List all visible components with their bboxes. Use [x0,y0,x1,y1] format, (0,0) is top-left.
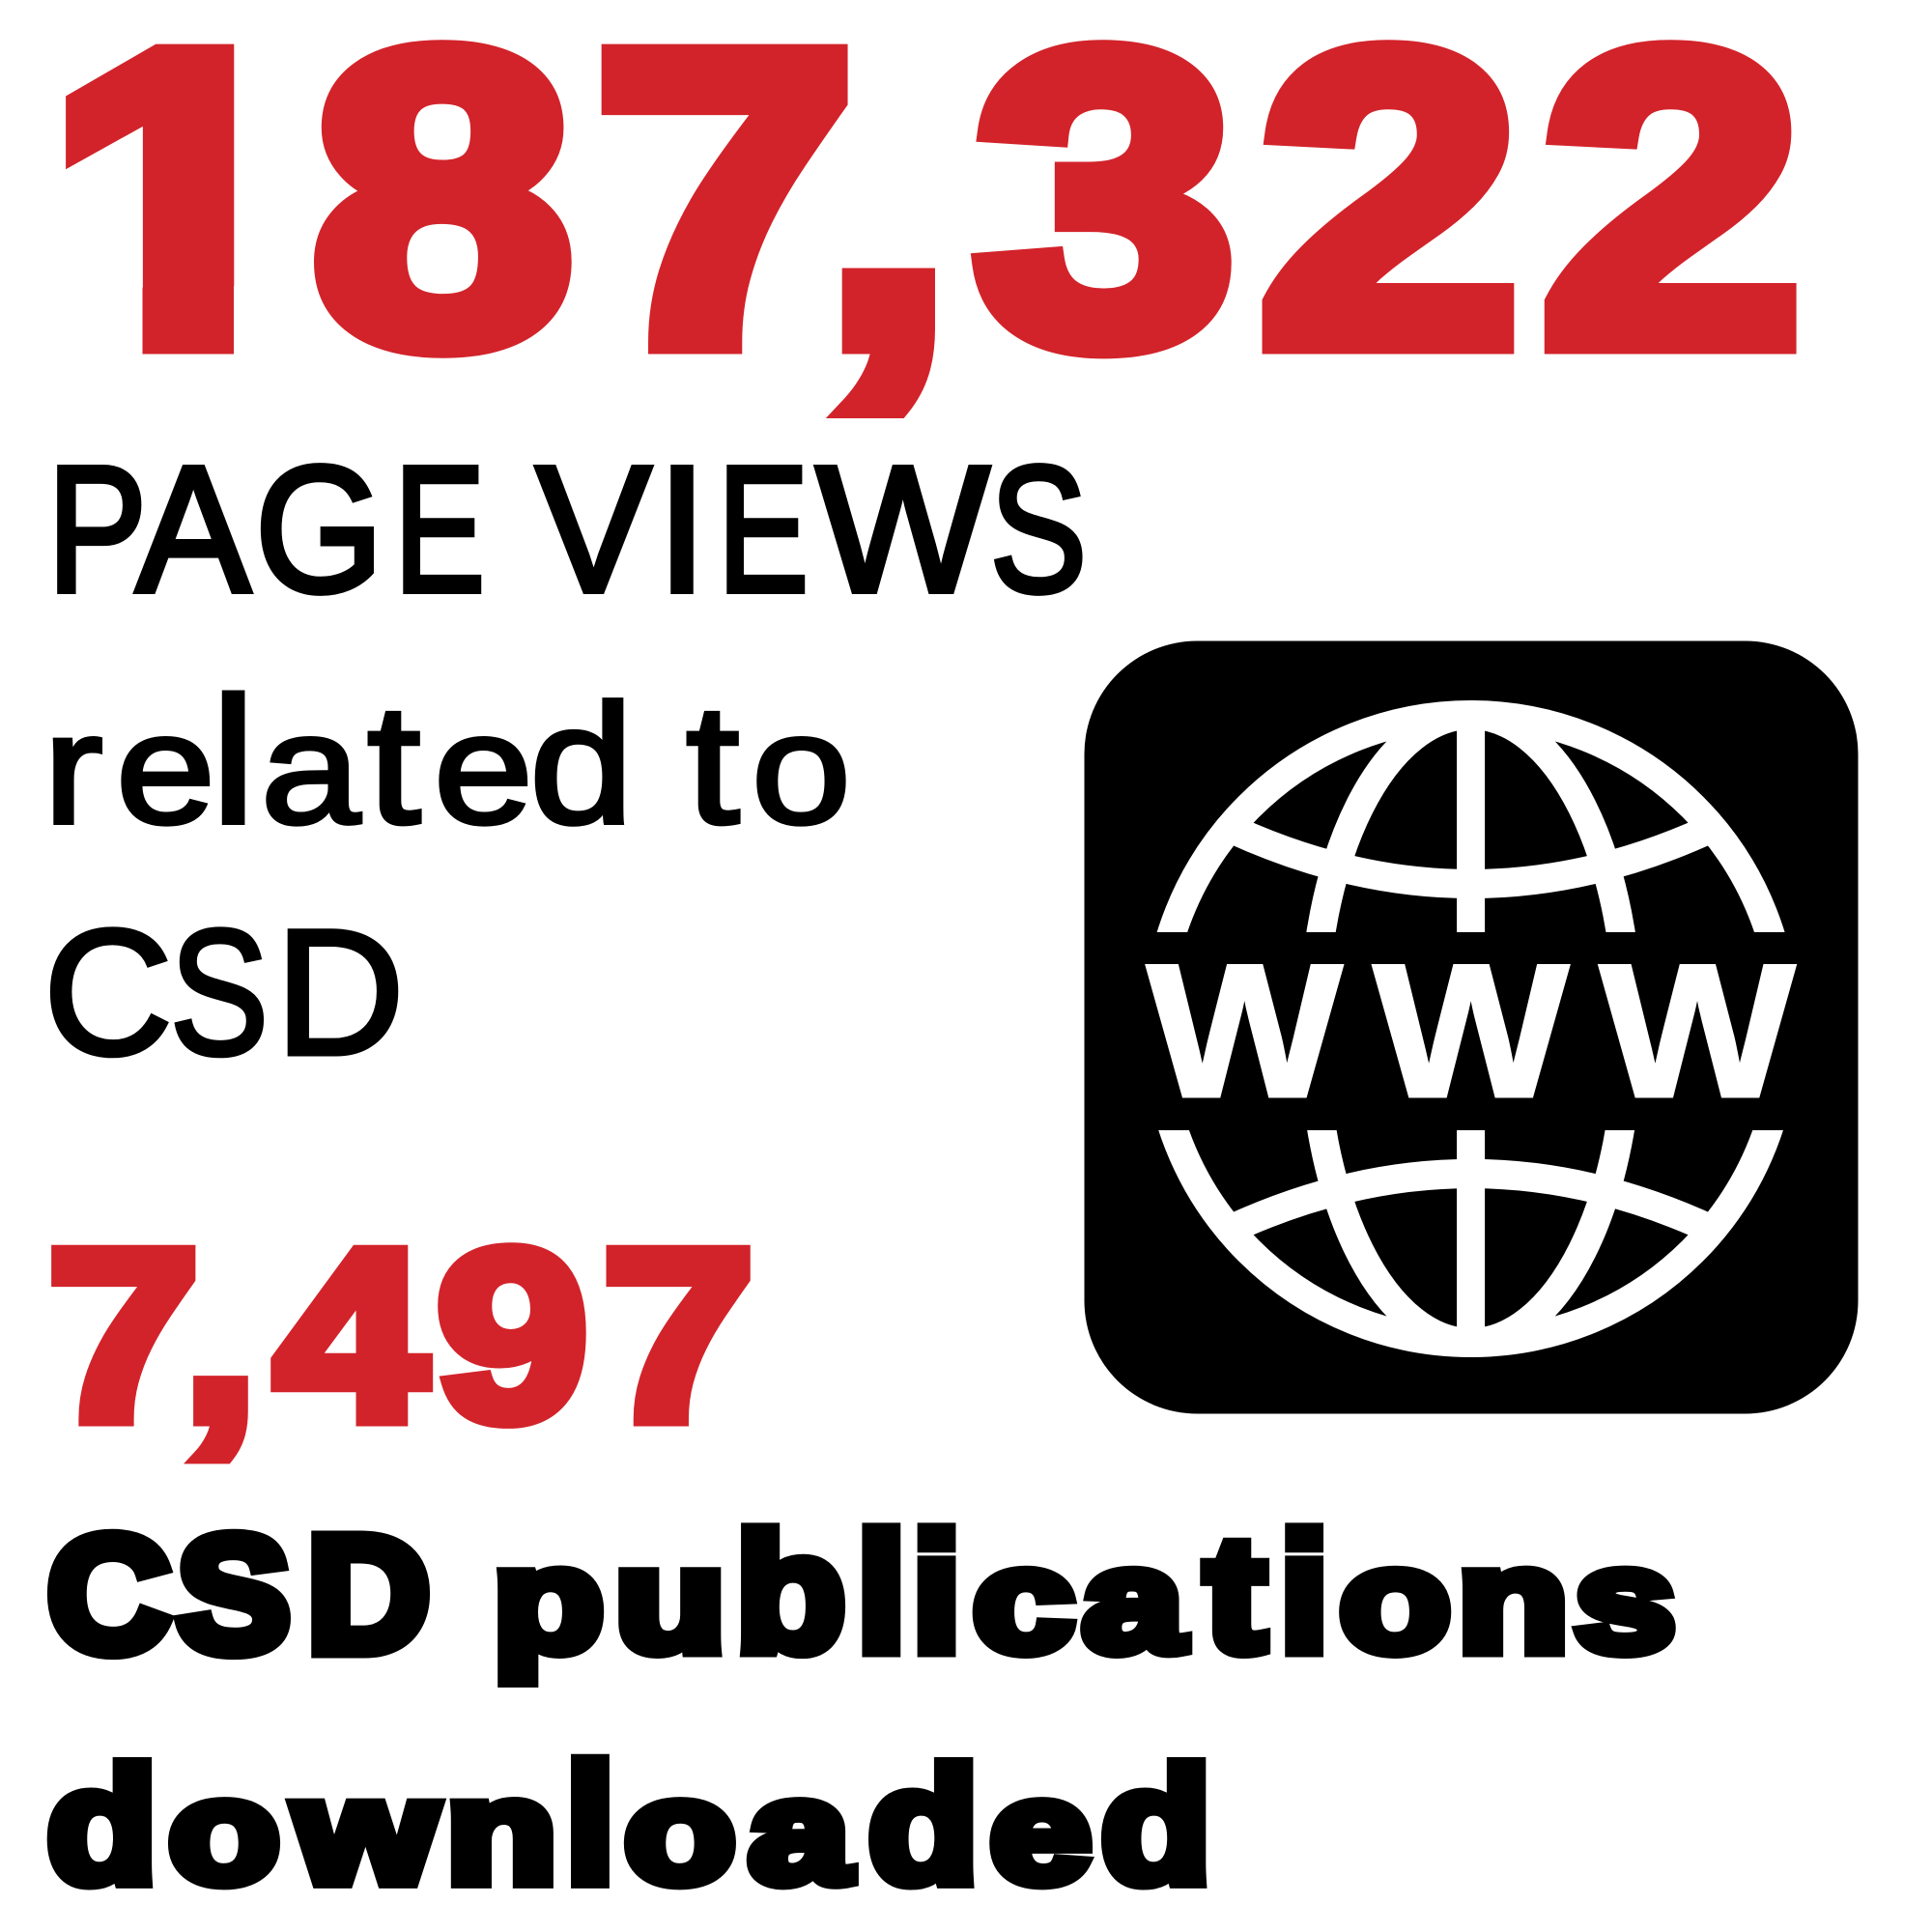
heading: CSD publications [47,1499,1675,1687]
label: related to: d [529,668,634,859]
label: PAGE VIEWS: S [990,430,1087,630]
icon: www globe: WWW [1147,923,1796,1137]
heading: CSD publications: CSD [47,1502,430,1686]
label: related to: a [261,680,360,856]
heading: downloaded: d [1101,1735,1211,1918]
label: related to: t [686,668,740,859]
heading: CSD publications: b [735,1499,846,1687]
label: CSD: D [275,894,405,1093]
heading: downloaded: l [565,1731,615,1918]
label: related to: t [367,668,421,859]
label: PAGE VIEWS: P [47,430,147,630]
label: related to: e [434,680,533,856]
heading: CSD publications: t [1205,1504,1265,1686]
heading: downloaded: d [868,1735,979,1918]
label: PAGE VIEWS: I [657,430,707,630]
heading: CSD publications: i [1279,1499,1329,1687]
heading: CSD publications: ca [974,1520,1184,1683]
label: PAGE VIEWS: G [255,430,384,630]
heading: downloaded: own [169,1750,556,1914]
label: related to: l [211,661,256,862]
label: CSD: C [43,894,173,1093]
icon: www globe [1084,641,1859,1414]
big number: publications downloaded count: 7,497 [47,1200,754,1471]
heading: downloaded: e [990,1750,1091,1914]
heading: CSD publications: pu [493,1520,725,1683]
label: PAGE VIEWS: V [536,430,651,630]
heading: CSD publications: ons [1340,1520,1675,1683]
heading: downloaded: d [46,1735,157,1918]
label: related to: re [43,680,215,856]
heading: CSD publications: i [912,1499,962,1687]
label: PAGE VIEWS: E [718,430,809,630]
heading: downloaded: oa [625,1750,851,1914]
label: related to: o [752,680,851,856]
label: PAGE VIEWS: A [136,430,250,630]
heading: CSD publications: l [857,1499,906,1687]
label: PAGE VIEWS: E [394,430,485,630]
label: PAGE VIEWS: W [816,430,989,630]
label: CSD: S [170,894,269,1093]
